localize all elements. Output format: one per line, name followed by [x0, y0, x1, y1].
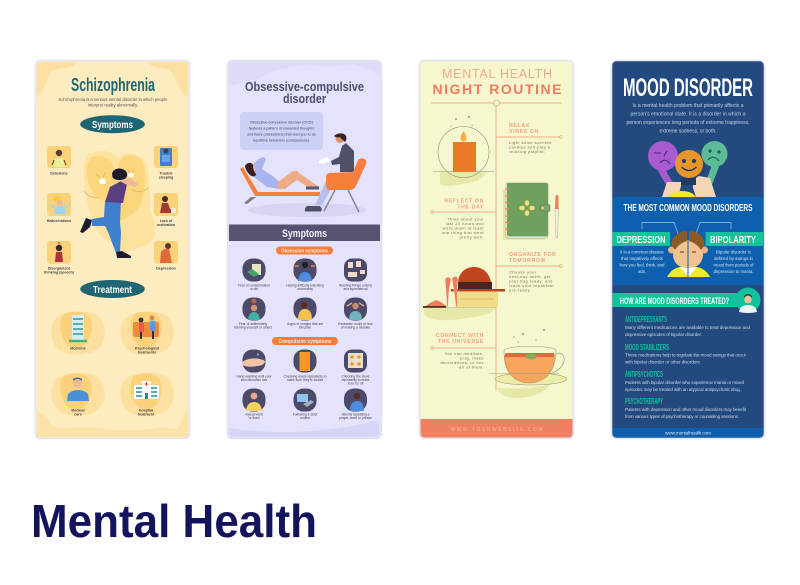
label: difficulty tolerating uncertainty: uncertainty: [297, 287, 313, 291]
heading: Treatment: Treatment: [93, 285, 133, 296]
label: Trouble sleeping: sleeping: [159, 176, 173, 180]
label: Hospital treatment: Hospital: [139, 408, 153, 412]
footer band: website: WWW.YOURWEBSITE.COM: [450, 427, 542, 433]
label: Trouble sleeping: Trouble: [160, 172, 172, 176]
label: Delusions: Delusions: [50, 172, 68, 176]
label: Depression: [612, 232, 670, 246]
banner: how are mood disorders treated: [612, 288, 760, 313]
text: bipolarity description: Bipolar disorder is: [716, 250, 752, 254]
icon: lack of motivation: [154, 193, 178, 216]
text: Organize for tomorrow: Choose your: [509, 270, 537, 274]
label: Psychological treatments: treatments: [138, 350, 156, 354]
label: needing things orderly: Needing things orderly: [339, 284, 372, 288]
text: Reflect on the day: [442, 198, 484, 240]
text: Relax vibes on: relaxing playlist.: [509, 149, 546, 154]
text: Reflect on the day: write down at least: [442, 226, 484, 230]
text: Organize for tomorrow: next-day outfit, get: [509, 274, 551, 279]
text: Reflect on the day: REFLECT ON: [444, 198, 484, 204]
text: Organize for tomorrow: [509, 252, 557, 292]
treatment: antipsychotics: ANTIPSYCHOTICS: [625, 370, 663, 379]
title: Mental Health Night Routine: NIGHT ROUTINE: [432, 81, 562, 97]
treatment: medicine: [51, 312, 105, 355]
text: Connect with the universe: declarations, or mix: [440, 360, 484, 365]
label: fear of contamination: or dirt: [250, 287, 258, 291]
illustration: split face person: [667, 230, 710, 277]
title: Schizophrenia: Schizophrenia: [71, 75, 156, 95]
text: depression description: that negatively affects: [621, 256, 664, 261]
text: Reflect on the day: Think about your: [447, 216, 484, 222]
illustration: notebook and pen: [503, 183, 558, 240]
symptom: fear of contamination: [242, 258, 266, 282]
footer: website: [612, 428, 764, 438]
treatment: antidepressants: Many different medications are available to treat depression and: [625, 325, 750, 330]
label: checking the stove: sure it's off: [348, 382, 363, 386]
description text: Schizophrenia is a serious mental disorder in which people: [59, 97, 168, 102]
label: checking doors: make sure they're locked: [287, 378, 323, 382]
text: Connect with the universe: all of them.: [459, 364, 484, 370]
treatment: antipsychotics: [625, 370, 744, 392]
text: bipolarity description: mood from periods of: [714, 262, 754, 268]
symptom: checking the stove: [344, 350, 367, 372]
treatment: antipsychotics: Patients with bipolar disorder who experience mania or mixed: [625, 380, 744, 385]
text: Connect with the universe: pray, make: [460, 356, 484, 360]
panel: mood disorder: [612, 60, 764, 438]
label: excessive doubt: of making a mistake: [341, 326, 370, 330]
label: Lack of motivation: motivation: [157, 223, 175, 227]
pill: Obsession symptoms: Obsession symptoms: [281, 248, 328, 254]
text box: OCD description: features a pattern of unwanted thoughts: [249, 126, 314, 130]
heading: Treatment: [80, 280, 145, 298]
icon: doctor: [736, 288, 760, 313]
label: checking the stove: Checking the stove: [341, 374, 370, 378]
text: Reflect on the day: last 24 hours and: [446, 221, 484, 226]
illustration: candle: [433, 116, 494, 186]
pill: Obsession symptoms: [276, 246, 333, 254]
title: Obsessive-compulsive disorder: Obsessive-compulsive: [245, 80, 364, 94]
text box: OCD description: and fears (obsessions) that lead you to do: [247, 132, 316, 136]
label: Medicine: Medicine: [70, 346, 86, 350]
text: Relax vibes on: [509, 123, 552, 154]
icon: disorganized thinking: [47, 241, 71, 264]
illustration: running figure over brain: [80, 151, 155, 258]
label: repeat word: repeat word: [245, 412, 263, 416]
pill: Compulsion symptoms: Compulsion symptoms: [278, 339, 332, 345]
treatment: antidepressants: ANTIDEPRESSANTS: [625, 315, 667, 324]
label: Disorganized thinking (speech): thinking (speech): [44, 270, 75, 274]
treatment: psychotherapy: Patients with depression and other mood disorders may benefit: [625, 407, 747, 412]
title: Obsessive-compulsive disorder: disorder: [283, 92, 326, 106]
symptom: hand washing: [242, 350, 266, 372]
treatment: mood stabilizers: [625, 343, 746, 364]
symptom: fear of harming: [242, 298, 266, 320]
label: silently repeating: Silently repeating a: [341, 412, 370, 416]
symptom: following a strict routine: [294, 388, 316, 412]
panel: night routine: [420, 60, 574, 438]
heading band: Symptoms: [229, 224, 380, 241]
footer: website: www.mentalhealth.com: [665, 430, 711, 436]
label: urges or images: intrusive: [299, 326, 311, 330]
connector lines: [642, 222, 731, 236]
label: hand washing: Hand washing until your: [236, 374, 272, 378]
label: checking doors: Checking doors repeatedly to: [284, 374, 327, 378]
title: Mental Health: Mental Health: [31, 495, 317, 547]
label: Medical care: Medical: [71, 408, 85, 412]
text: Organize for tomorrow: pre-ready.: [509, 288, 531, 292]
text: bipolarity description: defined by swings in: [714, 256, 754, 261]
label: needing things orderly: and symmetrical: [343, 287, 368, 291]
panel: obsessive-compulsive disorder: [228, 60, 382, 438]
intro text: Is a mental health problem that primarily affects a: [632, 103, 744, 109]
symptom: urges or images: [294, 298, 316, 320]
text: depression description: how you feel, think, and: [620, 262, 665, 268]
intro text: person experiences long periods of extreme happiness,: [626, 120, 750, 126]
label: Hallucinations: Hallucinations: [47, 219, 71, 223]
title: Mental Health Night Routine: MENTAL HEALTH: [442, 67, 552, 81]
treatment: mood stabilizers: with bipolar disorder or other disorders.: [625, 360, 701, 364]
label: silently repeating: prayer, word or phrase: [339, 416, 372, 420]
heading: Symptoms: Symptoms: [92, 120, 133, 131]
symptom: silently repeating: [344, 388, 367, 412]
text box: OCD description: Obsessive-compulsive disorder (OCD): [250, 120, 313, 124]
label: Medical care: care: [74, 412, 82, 416]
label: fear of harming: harming yourself or others: [234, 326, 272, 330]
label: Lack of motivation: Lack of: [160, 219, 173, 223]
label: following a strict routine: routine: [300, 416, 310, 420]
text: Connect with the universe: THE UNIVERSE: [438, 339, 484, 345]
label: Depression: Depression: [156, 266, 176, 270]
footer band: website: [420, 419, 572, 438]
text: Organize for tomorrow: leave your breakfast: [509, 283, 554, 288]
illustration: hat, books and shoes: [423, 267, 505, 320]
text box: OCD description: [240, 112, 323, 150]
section: most common mood disorders: [612, 197, 764, 285]
text: Relax vibes on: candles and play a: [509, 144, 551, 150]
label: fear of harming: Fear of deliberately: [239, 322, 267, 326]
illustration: therapy session: [240, 133, 366, 217]
panel: schizophrenia: [36, 60, 190, 438]
treatment: medical care: [51, 373, 105, 416]
intro text: person's emotional state. It is a disorder in which a: [630, 112, 746, 118]
text: bipolarity description: depression to mania.: [714, 269, 754, 274]
label: Bipolarity: BIPOLARITY: [710, 235, 756, 246]
intro text: extreme sadness, or both.: [660, 128, 716, 134]
text: Relax vibes on: Light some scented: [509, 140, 552, 145]
label: Hospital treatment: treatment: [138, 412, 155, 416]
description text: interpret reality abnormally.: [88, 102, 138, 108]
label: Disorganized thinking (speech): Disorganized: [48, 266, 70, 270]
text: Relax vibes on: VIBES ON: [509, 129, 539, 135]
label: checking the stove: repeatedly to make: [341, 378, 370, 382]
title: Mental Health Night Routine: [432, 67, 562, 97]
icon: hallucinations: [47, 193, 71, 216]
text: Connect with the universe: [436, 333, 484, 370]
treatment: antipsychotics: episodes may be treated with an atypical antipsychotic drug.: [625, 387, 741, 392]
treatment: psychological treatments: [120, 312, 174, 355]
symptom: repeat word: [242, 388, 266, 412]
timeline: [430, 100, 562, 391]
treatment: antidepressants: depressive episodes of bipolar disorder.: [625, 332, 702, 337]
label: Bipolarity: [706, 232, 763, 246]
treatment: antidepressants: [625, 315, 750, 337]
text: Reflect on the day: one thing that went: [442, 230, 484, 235]
icon: trouble sleeping: [154, 146, 178, 168]
pill: Compulsion symptoms: [272, 337, 338, 345]
label: urges or images: Urges or images that are: [287, 322, 323, 326]
treatment: psychotherapy: from various types of psychotherapy or counseling sessions.: [625, 414, 739, 419]
label: fear of contamination: Fear of contamination: [238, 284, 270, 288]
heading: Symptoms: [80, 115, 145, 133]
label: repeat word: or fixed: [249, 416, 260, 420]
symptom: needing things orderly: [344, 258, 367, 282]
treatment: mood stabilizers: These medications help to regulate the mood swings that occur: [625, 352, 746, 358]
icon: delusions: [47, 146, 71, 168]
text: Connect with the universe: CONNECT WITH: [436, 333, 484, 339]
treatment: mood stabilizers: MOOD STABILIZERS: [625, 343, 669, 352]
illustration: tea cup: [489, 329, 567, 398]
label: Depression: DEPRESSION: [616, 235, 666, 246]
text: Organize for tomorrow: ORGANIZE FOR: [509, 252, 557, 258]
text: Reflect on the day: pretty well.: [459, 234, 484, 240]
treatment: psychotherapy: PSYCHOTHERAPY: [625, 397, 663, 406]
text box: OCD description: repetitive behaviors (compulsions).: [253, 138, 310, 142]
text: Organize for tomorrow: TOMORROW: [509, 258, 546, 264]
label: following a strict routine: Following a strict: [293, 412, 317, 416]
text: depression description: It is a common disease: [620, 250, 665, 254]
text: Reflect on the day: THE DAY: [457, 204, 484, 210]
symptom: excessive doubt: [344, 298, 367, 320]
label: hand washing: skin becomes raw: [241, 378, 268, 382]
icon: depression: [154, 241, 178, 264]
text: Relax vibes on: RELAX: [509, 123, 530, 129]
symptom: difficulty tolerating uncertainty: [294, 258, 316, 282]
illustration: three moods faces: [648, 141, 728, 197]
text: Connect with the universe: You can meditate,: [444, 351, 484, 356]
text: Organize for tomorrow: your bag ready, and: [509, 278, 553, 284]
label: difficulty tolerating uncertainty: Having difficulty tolerating: [286, 284, 324, 288]
treatment: hospital treatment: [120, 373, 174, 416]
symptom: checking doors: [294, 350, 316, 372]
text: depression description: acts.: [638, 269, 646, 274]
label: Psychological treatments: Psychological: [135, 346, 159, 350]
treatment: psychotherapy: [625, 397, 747, 419]
label: excessive doubt: Excessive doubt or fear: [338, 322, 374, 326]
heading band: Symptoms: Symptoms: [282, 228, 327, 240]
